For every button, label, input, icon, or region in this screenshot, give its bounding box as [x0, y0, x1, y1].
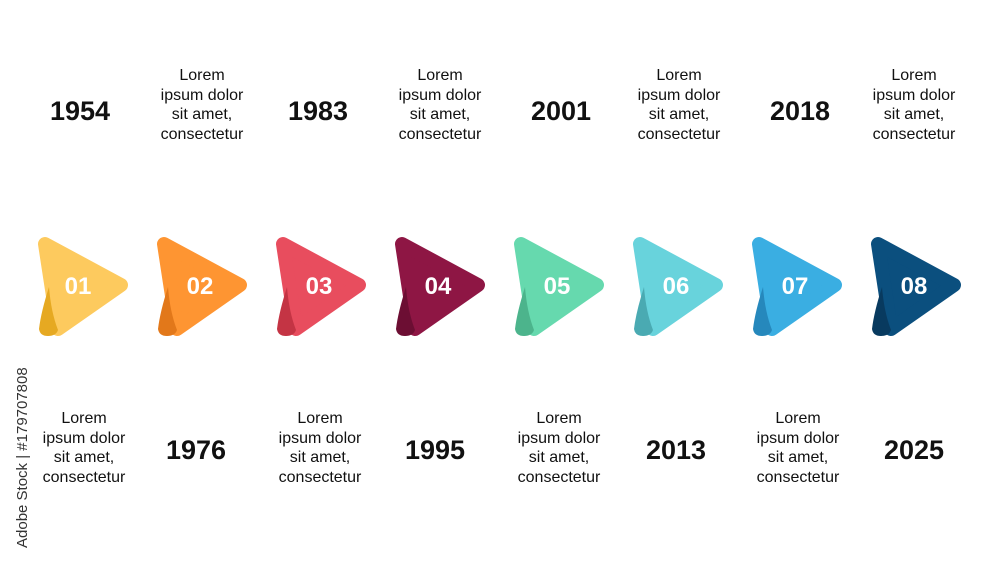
arrow 03: 03 [306, 273, 332, 300]
arrow 06 [634, 244, 716, 336]
text: 2025 [884, 435, 944, 465]
text: sit amet, [410, 106, 470, 123]
text: 1995 [405, 435, 465, 465]
bottom texts: ipsum dolor [43, 430, 125, 446]
top texts: Lorem [179, 67, 225, 84]
text: 1983 [288, 96, 348, 126]
text: consectetur [518, 468, 600, 486]
text: ipsum dolor [518, 430, 600, 446]
text: ipsum dolor [638, 86, 720, 104]
arrow 02 [158, 244, 240, 336]
text: consectetur [399, 126, 481, 142]
text: 2013 [646, 435, 706, 465]
arrow 08: 08 [901, 273, 927, 300]
text: ipsum dolor [279, 430, 361, 446]
text: sit amet, [290, 449, 350, 466]
bottom texts [43, 410, 126, 486]
arrow 03 [277, 244, 359, 336]
text: Lorem [536, 410, 582, 427]
text: Lorem [297, 410, 343, 427]
arrow 07: 07 [782, 273, 808, 300]
top texts [161, 67, 244, 142]
arrow 04: 04 [425, 273, 452, 300]
bottom years: 1976 [166, 435, 226, 465]
text: Lorem [891, 67, 937, 84]
text: 2001 [531, 96, 591, 126]
bottom texts: Lorem [61, 410, 107, 427]
arrow 01 [39, 244, 121, 336]
watermark side text: Adobe Stock | #179707808 [14, 367, 31, 548]
top texts: consectetur [161, 126, 243, 142]
text: sit amet, [884, 106, 944, 123]
arrow 02: 02 [187, 273, 213, 300]
text: consectetur [279, 468, 361, 486]
text: Lorem [417, 67, 463, 84]
bottom texts: sit amet, [54, 449, 114, 466]
arrow 01: 01 [65, 273, 91, 300]
text: sit amet, [529, 449, 589, 466]
arrow 07 [753, 244, 835, 336]
arrow 06: 06 [663, 273, 689, 300]
text: ipsum dolor [873, 86, 955, 104]
top years: 1954 [50, 96, 110, 126]
text: consectetur [873, 126, 955, 142]
top texts: ipsum dolor [161, 86, 243, 104]
arrow 04 [396, 244, 478, 336]
bottom texts: consectetur [43, 468, 125, 486]
top texts: sit amet, [172, 106, 232, 123]
text: Lorem [775, 410, 821, 427]
text: 2018 [770, 96, 830, 126]
text: ipsum dolor [399, 86, 481, 104]
text: sit amet, [768, 449, 828, 466]
text: Lorem [656, 67, 702, 84]
arrow 05: 05 [544, 273, 570, 300]
text: consectetur [757, 468, 839, 486]
text: sit amet, [649, 106, 709, 123]
arrow 05 [515, 244, 597, 336]
text: ipsum dolor [757, 430, 839, 446]
arrow 08 [872, 244, 954, 336]
text: consectetur [638, 126, 720, 142]
